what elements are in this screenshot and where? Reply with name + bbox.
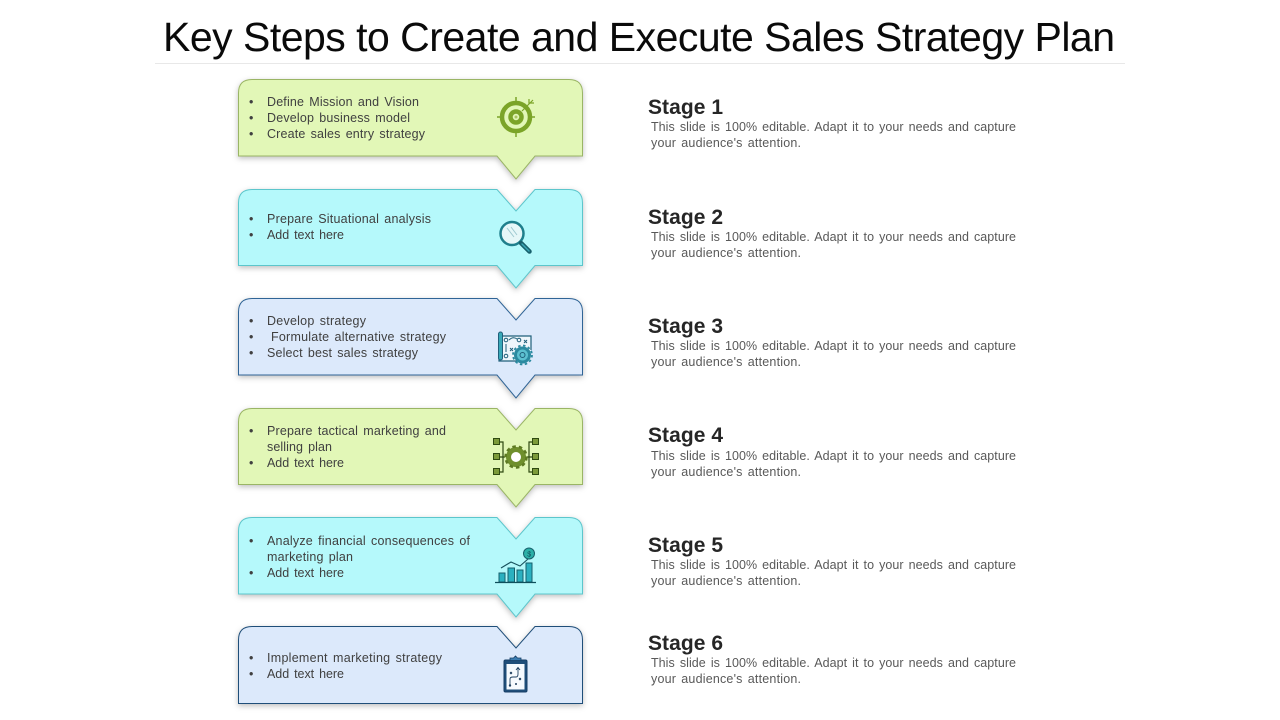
step 3 text: • (249, 314, 253, 328)
step 1 text: • (249, 127, 253, 141)
stage 4 text: This slide is 100% editable. Adapt it to your needs and capture (651, 449, 1016, 463)
step 5 text: • (249, 566, 253, 580)
step 4 text: selling plan (267, 440, 332, 454)
step 5 text: Add text here (267, 566, 344, 580)
stage 6 text: This slide is 100% editable. Adapt it to your needs and capture (651, 656, 1016, 670)
icon: clipboard plan (504, 656, 527, 692)
step 4 text: Add text here (267, 456, 344, 470)
icon: strategy map with gear (498, 332, 532, 364)
step 2 text: Add text here (267, 228, 344, 242)
stage 5 text: your audience's attention. (651, 574, 801, 588)
step 5 text (249, 534, 471, 580)
step 6 text: • (249, 651, 253, 665)
step 2 text: • (249, 228, 253, 242)
step 5 text: • (249, 534, 253, 548)
step 1 text: Create sales entry strategy (267, 127, 426, 141)
stage 3 text: your audience's attention. (651, 355, 801, 369)
step 4 text: Prepare tactical marketing and (267, 424, 446, 438)
step 4 text: • (249, 424, 253, 438)
stage 4 text: Stage 4 (648, 424, 723, 447)
panel: step 3 (238, 298, 582, 398)
step 1 text: Define Mission and Vision (267, 95, 419, 109)
stage 2 text: Stage 2 (648, 206, 723, 229)
stage 3 text (648, 315, 1016, 369)
title: Key Steps to Create and Execute Sales Strategy Plan (163, 14, 1115, 60)
stage 1 text: your audience's attention. (651, 136, 801, 150)
step 5 text: Analyze financial consequences of (267, 534, 471, 548)
step 2 text: Prepare Situational analysis (267, 212, 431, 226)
step 3 text: Formulate alternative strategy (271, 330, 447, 344)
panel: step 1 (238, 80, 582, 179)
step 6 text: • (249, 667, 253, 681)
step 1 text (249, 95, 426, 141)
step 6 text: Add text here (267, 667, 344, 681)
step 1 text: • (249, 95, 253, 109)
stage 5 text: Stage 5 (648, 534, 723, 557)
step 3 text: • (249, 346, 253, 360)
stage 1 text (648, 96, 1016, 150)
step 2 text: • (249, 212, 253, 226)
stage 2 text (648, 206, 1016, 260)
step 3 text: Develop strategy (267, 314, 367, 328)
stage 6 text (648, 632, 1016, 686)
stage 6 text: your audience's attention. (651, 672, 801, 686)
step 6 text: Implement marketing strategy (267, 651, 443, 665)
stage 1 text: Stage 1 (648, 96, 723, 119)
icon: target (497, 97, 535, 137)
step 4 text: • (249, 456, 253, 470)
step 3 text (249, 314, 447, 360)
stage 5 text: This slide is 100% editable. Adapt it to your needs and capture (651, 558, 1016, 572)
stage 6 text: Stage 6 (648, 632, 723, 655)
step 3 text: Select best sales strategy (267, 346, 419, 360)
panel: step 2 (238, 190, 582, 288)
icon: growth chart with coin: $ (527, 552, 531, 558)
icon: gear with connected nodes (494, 438, 538, 474)
stage 1 text: This slide is 100% editable. Adapt it to your needs and capture (651, 120, 1016, 134)
step 2 text (249, 212, 431, 242)
panel: step 6 (238, 626, 582, 704)
step 3 text: • (249, 330, 253, 344)
stage 2 text: your audience's attention. (651, 246, 801, 260)
icon: growth chart with coin (495, 548, 536, 582)
step 6 text (249, 651, 443, 681)
stage 2 text: This slide is 100% editable. Adapt it to your needs and capture (651, 230, 1016, 244)
panel: step 4 (238, 408, 582, 507)
stage 3 text: This slide is 100% editable. Adapt it to your needs and capture (651, 339, 1016, 353)
panel: step 5 (238, 518, 582, 617)
step 1 text: Develop business model (267, 111, 410, 125)
step 4 text (249, 424, 446, 470)
icon: magnifier (500, 222, 530, 252)
step 1 text: • (249, 111, 253, 125)
stage 5 text (648, 534, 1016, 588)
stage 4 text: your audience's attention. (651, 465, 801, 479)
step 5 text: marketing plan (267, 550, 353, 564)
stage 4 text (648, 424, 1016, 479)
stage 3 text: Stage 3 (648, 315, 723, 338)
